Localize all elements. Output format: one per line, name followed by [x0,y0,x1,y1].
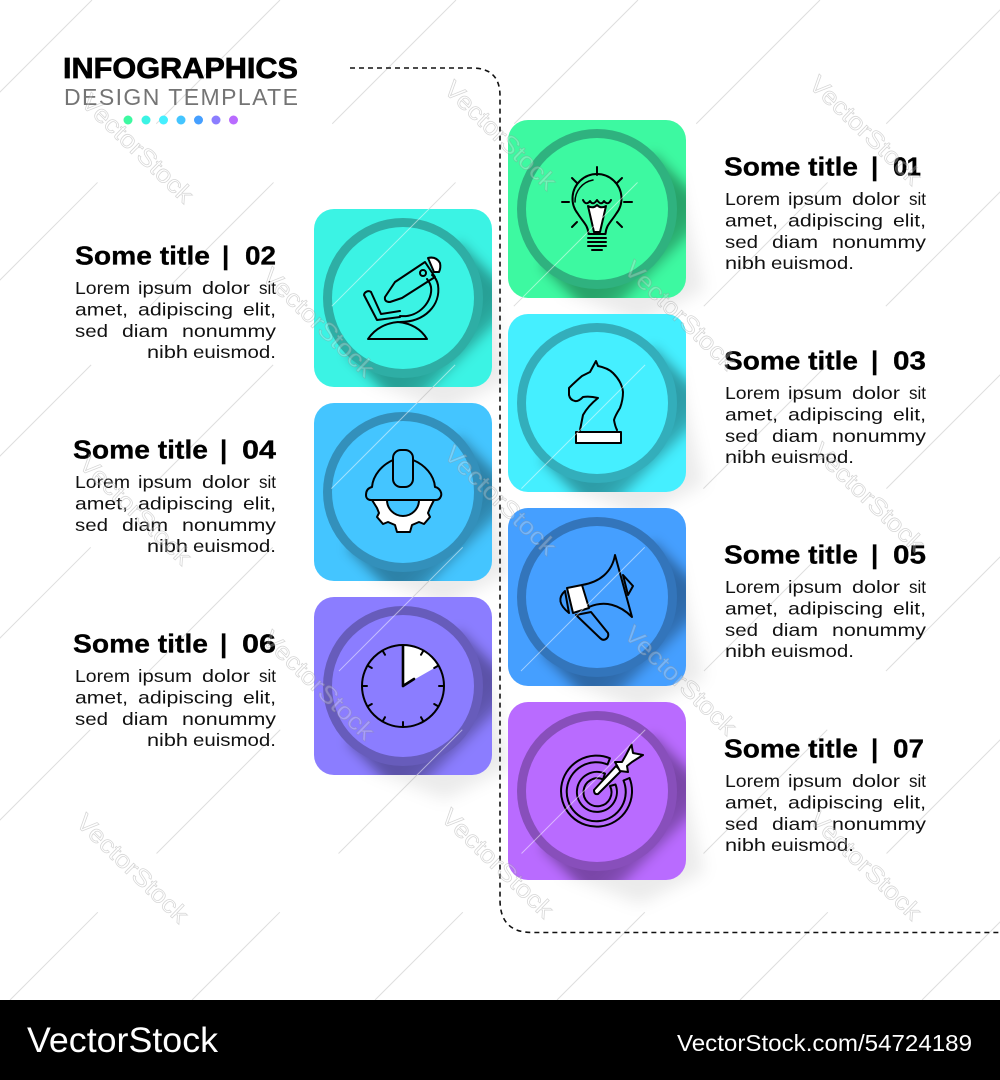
card [508,508,686,686]
text: step 06: diam [122,709,168,729]
long shadow [537,537,686,686]
text: step 07: ipsum [788,771,842,791]
text: step 05: adipiscing [788,599,883,619]
card [508,314,686,492]
header title block [63,53,298,124]
disc [526,332,668,474]
watermarks: VectorStock [618,621,742,742]
text: step 06: elit, [243,688,276,708]
text: step 04: sit [259,472,276,492]
white line overlay on cards [331,182,646,854]
icon: light bulb [562,167,632,250]
text: step 02: ipsum [138,278,192,298]
text: step 03: nonummy [832,426,926,446]
long shadow [537,731,686,880]
text: step 07: | [871,734,878,764]
disc [332,421,474,563]
panel: step 04 [314,403,492,581]
text: step 06: ipsum [138,666,192,686]
subtitle: DESIGN TEMPLATE [64,84,298,110]
text: step 04: Lorem [75,472,130,492]
text: step 05: Some title [724,540,858,570]
text: step 07: amet, [725,793,778,813]
text: step 01: euismod. [771,253,854,273]
text: step 01: nibh [725,253,766,273]
text: step 02: sed [75,321,108,341]
text: step 05: diam [772,620,818,640]
text: step 01: | [871,152,878,182]
outer soft shadows [365,170,704,904]
text: step 01: amet, [725,210,778,230]
text: step 06: nibh [147,730,188,750]
ring [323,218,483,378]
text: step 06: sed [75,709,108,729]
text: step 05: sed [725,620,758,640]
text: step 05: amet, [725,599,778,619]
text: step 02: elit, [243,300,276,320]
text: step 02: nibh [147,342,188,362]
text: step 01: adipiscing [788,210,883,230]
text: step 03: sit [909,383,926,403]
text: step 04: dolor [202,472,250,492]
long shadow [537,343,686,492]
text: step 07 [724,734,926,855]
text: step 05: dolor [852,577,900,597]
text: step 05 [724,540,926,661]
text: step 06: 06 [242,629,276,659]
watermarks: VectorStock [618,256,742,377]
footer bar [0,1000,1000,1080]
text: step 01 [724,152,926,273]
text: step 03: Some title [724,346,858,376]
watermarks: VectorStock [75,89,199,210]
text: step 01: dolor [852,189,900,209]
text: step 06: sit [259,666,276,686]
text: step 03: 03 [893,346,926,376]
text: step 04: sed [75,515,108,535]
text: step 01: Some title [724,152,858,182]
text: step 05: euismod. [771,641,854,661]
text: step 06: amet, [75,688,128,708]
icon: chess knight [569,361,623,443]
text: step 06: dolor [202,666,250,686]
text: step 04: | [220,435,227,465]
text: step 02: Some title [75,241,210,271]
panel: step 05 [508,508,686,686]
text: step 06: Lorem [75,666,130,686]
text: step 03: ipsum [788,383,842,403]
icon: megaphone [560,555,633,640]
icon: clock [362,645,444,727]
text: step 04: elit, [243,494,276,514]
text: step 06: euismod. [193,730,276,750]
text: step 02: adipiscing [138,300,233,320]
text: step 02: dolor [202,278,250,298]
ring [517,129,677,289]
card [508,702,686,880]
ring [517,711,677,871]
text: step 07: euismod. [771,835,854,855]
text: step 06: adipiscing [138,688,233,708]
text: step 02: 02 [245,241,276,271]
card [314,597,492,775]
text: step 01: sed [725,232,758,252]
text: step 04: adipiscing [138,494,233,514]
text: step 04: euismod. [193,536,276,556]
text: step 02: diam [122,321,168,341]
long shadow [343,238,492,387]
text: step 01: Lorem [725,189,780,209]
text: step 03: sed [725,426,758,446]
panel: step 03 [508,314,686,492]
watermarks: VectorStock [438,76,562,197]
watermarks [70,71,930,930]
ring [323,606,483,766]
icon: microscope [364,258,440,339]
watermarks: VectorStock [256,626,380,747]
text: step 01: sit [909,189,926,209]
watermarks: VectorStock [70,809,194,930]
text: step 02: euismod. [193,342,276,362]
text: step 06: Some title [73,629,208,659]
text: step 03: nibh [725,447,766,467]
card [314,403,492,581]
footer logo: VectorStock [27,1021,219,1060]
text: step 03: elit, [893,405,926,425]
text: step 06 [73,629,276,750]
long shadow [343,432,492,581]
text: step 07: nonummy [832,814,926,834]
text: step 07: nibh [725,835,766,855]
text: step 05: nonummy [832,620,926,640]
panel: step 02 [314,209,492,387]
text: step 04: diam [122,515,168,535]
text: step 04: nonummy [182,515,276,535]
text: step 03: Lorem [725,383,780,403]
text: step 01: diam [772,232,818,252]
text: step 03: euismod. [771,447,854,467]
text: step 07: 07 [893,734,924,764]
text: step 06: nonummy [182,709,276,729]
card [314,209,492,387]
text: step 03: | [871,346,878,376]
panel: step 06 [314,597,492,775]
watermarks: VectorStock [803,806,927,927]
text: step 05: elit, [893,599,926,619]
panel: step 07 [508,702,686,880]
ring [517,517,677,677]
text: step 07: elit, [893,793,926,813]
text: step 02: nonummy [182,321,276,341]
text: step 01: elit, [893,210,926,230]
text: step 05: sit [909,577,926,597]
text: step 07: dolor [852,771,900,791]
text: step 02 [75,241,276,362]
text: step 05: 05 [893,540,926,570]
text: step 01: nonummy [832,232,926,252]
text: step 03: adipiscing [788,405,883,425]
text: step 07: diam [772,814,818,834]
text: step 06: | [220,629,227,659]
watermarks: VectorStock [73,451,197,572]
footer url: VectorStock.com/54724189 [677,1030,972,1056]
icon: helmet and gear [366,450,441,532]
ring [323,412,483,572]
long shadow [537,149,686,298]
text: step 04: amet, [75,494,128,514]
icon: target with arrow [561,744,643,827]
text: step 02: | [222,241,229,271]
watermarks: VectorStock [438,441,562,562]
text: step 05: nibh [725,641,766,661]
text: step 01: ipsum [788,189,842,209]
title: INFOGRAPHICS [63,53,298,85]
text: step 05: Lorem [725,577,780,597]
disc [332,615,474,757]
disc [332,227,474,369]
text: step 01: 01 [893,152,920,182]
disc [526,526,668,668]
colour dots [124,116,238,124]
text: step 05: | [871,540,878,570]
text: step 02: Lorem [75,278,130,298]
watermarks: VectorStock [803,71,927,192]
text: step 04: 04 [242,435,277,465]
text: step 04: ipsum [138,472,192,492]
text: step 07: Lorem [725,771,780,791]
disc [526,720,668,862]
watermarks: VectorStock [806,438,930,559]
dashed connector line [350,68,1000,932]
card [508,120,686,298]
text: step 02: sit [259,278,276,298]
panel: step 01 [508,120,686,298]
text: step 04: Some title [73,435,208,465]
text: step 03: amet, [725,405,778,425]
text: step 07: adipiscing [788,793,883,813]
ring [517,323,677,483]
text: step 02: amet, [75,300,128,320]
text: step 03: dolor [852,383,900,403]
text: step 07: Some title [724,734,858,764]
text: step 04: nibh [147,536,188,556]
watermarks: VectorStock [435,804,559,925]
text: step 07: sit [909,771,926,791]
text: step 03: diam [772,426,818,446]
watermarks: VectorStock [256,263,380,384]
long shadow [343,626,492,775]
disc [526,138,668,280]
text: step 04 [73,435,277,556]
text: step 07: sed [725,814,758,834]
text: step 05: ipsum [788,577,842,597]
text: step 03 [724,346,926,467]
